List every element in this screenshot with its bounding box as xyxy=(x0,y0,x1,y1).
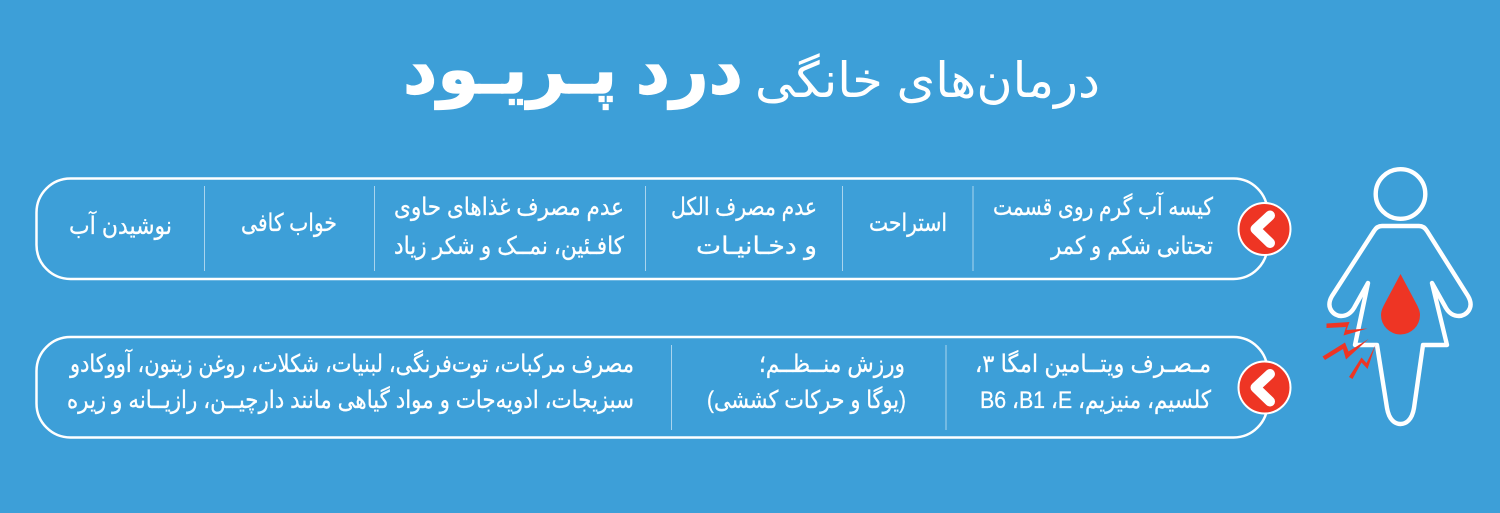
figure head xyxy=(1376,169,1425,219)
item: foods and herbs xyxy=(67,349,634,414)
item: regular exercise xyxy=(707,351,906,414)
item: avoid caffeine, salt, sugar xyxy=(394,194,624,260)
title bold part: درد پـریـود xyxy=(403,32,743,110)
icon: bottom chevron badge xyxy=(1238,362,1290,414)
item: regular exercise: ورزش منــظــم؛ xyxy=(759,351,905,378)
item: vitamins and minerals: کلسیم، منیزیم، E‏، B1‏، B6‏ xyxy=(980,387,1211,414)
item: avoid caffeine, salt, sugar: عدم مصرف غذاهای حاوی xyxy=(394,194,624,221)
item: vitamins and minerals: مـصـرف ویتــامین امگا ۳، xyxy=(975,350,1211,378)
item: drinking water: نوشیدن آب xyxy=(69,211,172,240)
pain lightning marks xyxy=(1322,322,1376,379)
panel: top row of remedies xyxy=(36,178,1268,279)
item: avoid caffeine, salt, sugar: کافـئین، نمــک و شکر زیاد xyxy=(394,233,624,260)
item: foods and herbs: سبزیجات، ادویه‌جات و مواد گیاهی مانند دارچیــن، رازیــانه و زیره xyxy=(67,386,634,414)
item: no alcohol and smoking: عدم مصرف الکل xyxy=(671,194,817,221)
item: vitamins and minerals xyxy=(975,350,1211,414)
item: foods and herbs: مصرف مرکبات، توت‌فرنگی، لبنیات، شکلات، روغن زیتون، آووکادو xyxy=(68,349,634,378)
icon: female body figure with pain xyxy=(1322,169,1471,424)
item: enough sleep: خواب کافی xyxy=(241,210,337,237)
title xyxy=(403,32,1100,110)
blood drop xyxy=(1381,274,1420,334)
figure body outline xyxy=(1329,226,1471,424)
icon: top chevron badge xyxy=(1238,203,1290,255)
title light part: درمان‌های خانگی xyxy=(755,53,1100,109)
panel: bottom row of remedies xyxy=(36,337,1268,438)
panel border xyxy=(36,178,1268,279)
item: hot water bag: تحتانی شکم و کمر xyxy=(1049,233,1213,260)
item: no alcohol and smoking xyxy=(671,194,817,260)
item: regular exercise: (یوگا و حرکات کششی) xyxy=(707,386,906,414)
item: hot water bag: کیسه آب گرم روی قسمت xyxy=(993,192,1213,221)
panel border xyxy=(36,337,1268,438)
item: hot water bag xyxy=(993,192,1213,260)
item: rest: استراحت xyxy=(869,210,947,237)
item: no alcohol and smoking: و دخـانیـات xyxy=(696,233,817,260)
